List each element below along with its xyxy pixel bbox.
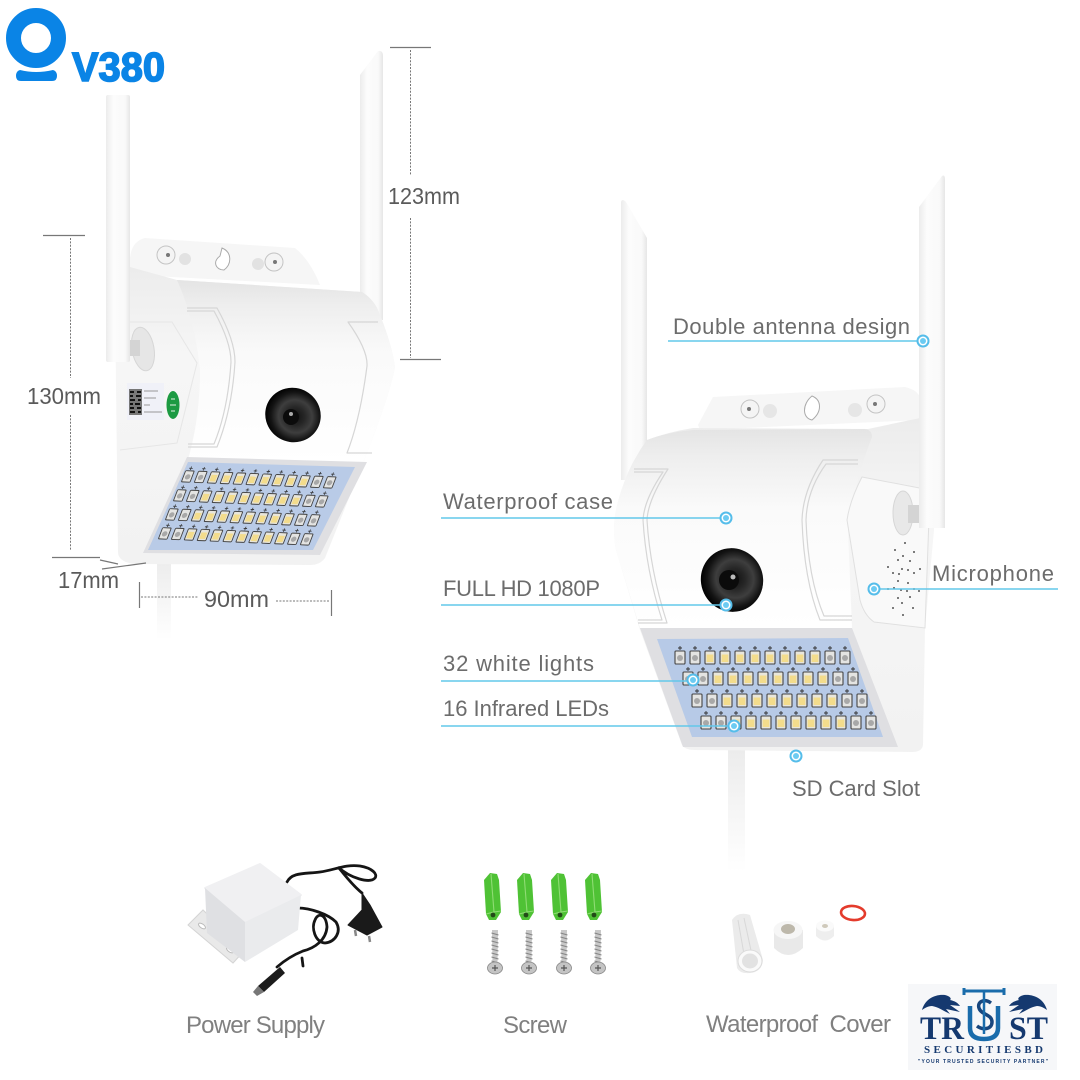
callout: 32 white lights	[441, 651, 700, 686]
callout: 32 white lights: 32 white lights	[443, 651, 594, 676]
dimension: 17mm: 17mm	[58, 567, 119, 593]
right camera lens	[690, 538, 774, 622]
callout: full hd 1080p: FULL HD 1080P	[443, 576, 600, 601]
power supply cables	[277, 866, 376, 967]
right eagle	[1009, 995, 1047, 1014]
callout: waterproof case: Waterproof case	[443, 489, 613, 514]
right camera cable	[728, 750, 745, 872]
caption: waterproof cover: Waterproof Cover	[706, 1011, 891, 1038]
right camera body	[614, 418, 935, 752]
logo: trust securities bd: SECURITIESBD	[924, 1044, 1043, 1056]
dimension: 130mm: 130mm	[27, 383, 101, 409]
left camera QR label	[127, 383, 180, 420]
right camera antenna base	[893, 491, 920, 535]
right camera right antenna	[919, 176, 945, 528]
logo: trust securities bd	[908, 984, 1057, 1070]
callout: full hd 1080p	[441, 576, 732, 612]
callout: microphone: Microphone	[932, 561, 1054, 586]
dimension: 123mm: 123mm	[388, 183, 460, 209]
logo: trust securities bd: ST	[1009, 1011, 1048, 1047]
callout: sd card slot	[790, 750, 920, 801]
right camera: features view	[614, 176, 945, 872]
callout: sd card slot: SD Card Slot	[792, 776, 920, 801]
dimension: 123mm	[388, 48, 460, 360]
left camera cable	[157, 560, 171, 640]
power supply wall plug	[348, 893, 382, 942]
caption: screw: Screw	[503, 1012, 568, 1039]
left camera mount bracket	[130, 238, 320, 285]
logo: V380: V380	[72, 44, 165, 90]
power supply DC plug	[253, 967, 285, 996]
logo: V380	[14, 16, 165, 90]
right camera LED panel	[640, 628, 898, 747]
right camera microphone side panel	[847, 477, 930, 628]
dimension: 90mm: 90mm	[204, 586, 269, 612]
left camera body	[115, 267, 395, 565]
callout: microphone	[868, 561, 1058, 596]
left camera LED panel	[143, 457, 367, 555]
monogram	[964, 988, 1004, 1039]
accessory: waterproof cover	[732, 905, 866, 973]
accessory: power supply	[188, 864, 382, 996]
callout: double antenna design	[668, 314, 930, 348]
left eagle	[922, 995, 960, 1014]
callout: 16 infrared leds	[441, 696, 740, 732]
left camera left antenna	[106, 95, 130, 362]
left camera antenna base	[128, 325, 158, 373]
trust wordmark: TR	[920, 1011, 965, 1047]
logo: trust securities bd: "YOUR TRUSTED SECURITY PARTNER"	[918, 1059, 1049, 1065]
dimension: 130mm	[27, 236, 101, 558]
dimension: 17mm	[58, 560, 146, 593]
accessory: screws and anchors	[484, 873, 606, 974]
callout: waterproof case	[441, 489, 732, 524]
caption: power supply: Power Supply	[186, 1012, 325, 1039]
callout: double antenna design: Double antenna design	[673, 314, 910, 339]
callout: 16 infrared leds: 16 Infrared LEDs	[443, 696, 609, 721]
left camera: dimensions view	[106, 51, 395, 640]
power supply box	[205, 864, 301, 962]
power supply flange	[188, 910, 245, 963]
left camera right antenna	[360, 51, 383, 320]
right camera left antenna	[621, 200, 647, 480]
right camera mount bracket	[698, 387, 920, 430]
dimension: 90mm	[140, 582, 332, 616]
left camera lens	[255, 378, 331, 452]
